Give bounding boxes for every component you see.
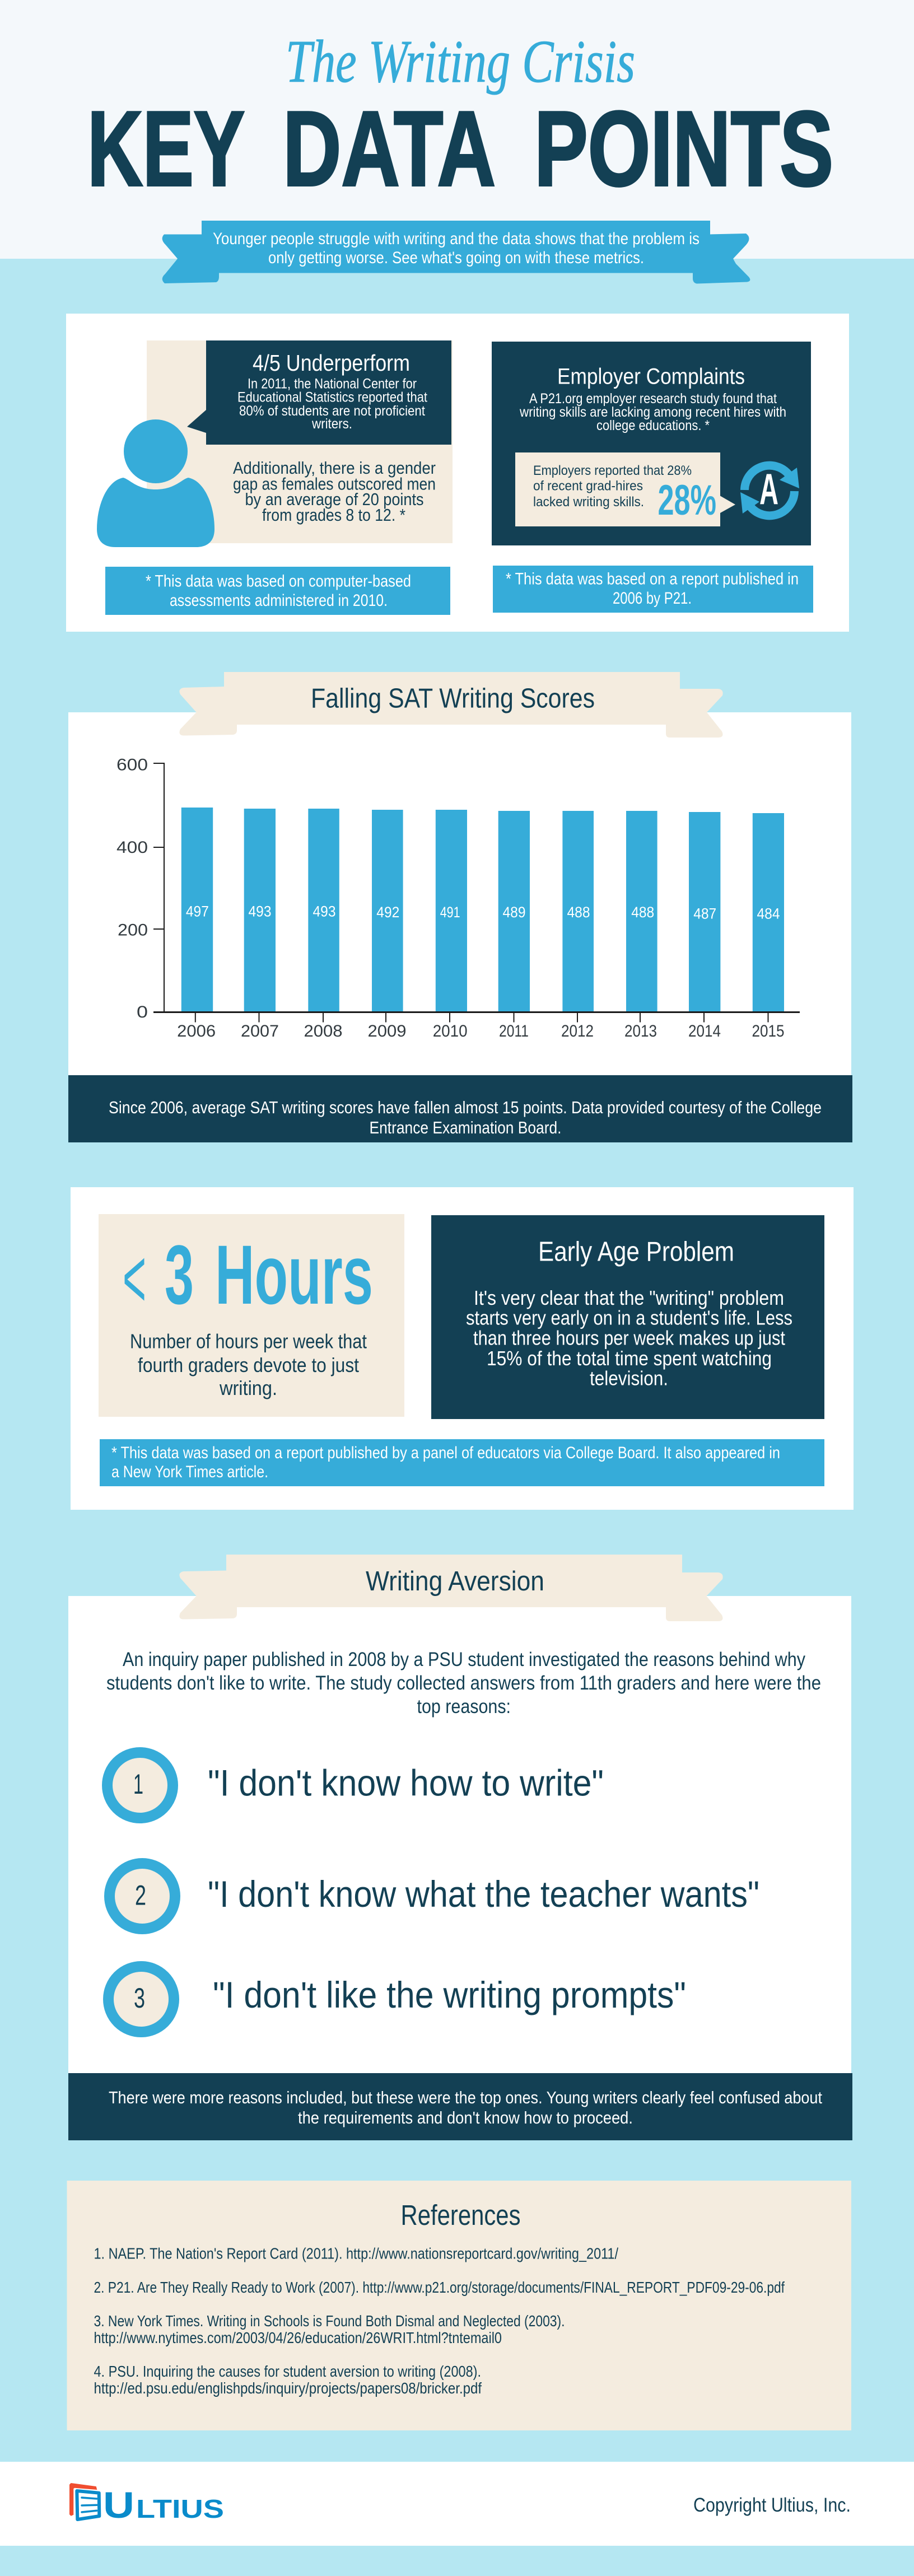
panel: employer complaints [492,342,811,545]
bar value labels: 493 [249,903,271,920]
x-axis year labels: 2014 [688,1022,721,1040]
caption: top reasons: the requirements and don't know how to proceed. [298,2108,633,2127]
y-axis labels: 200 [118,921,148,940]
text card: early age problem: Early Age Problem [538,1236,734,1267]
footer [0,2462,914,2546]
reason 3 [109,1967,686,2032]
icon: person [97,419,214,547]
reason 2: 2 [135,1879,146,1911]
heading ribbon: Writing Aversion [179,1555,723,1621]
text card: early age problem: 15% of the total time spent watching [487,1347,772,1370]
reason 2 [110,1864,759,1929]
stat card: under 3 hours: 3 [165,1228,194,1322]
note: computer-based assessments: assessments administered in 2010. [170,591,388,610]
icon: grade A with cycle arrows [740,464,799,516]
bars [181,808,784,1012]
caption: SAT scores: Entrance Examination Board. [370,1118,561,1137]
reason 2: "I don't know what the teacher wants" [208,1873,759,1915]
panel: 4/5 underperform: from grades 8 to 12. * [262,505,405,525]
intro paragraph: An inquiry paper published in 2008 by a PSU student investigated the reasons behind why [123,1649,805,1670]
reason 3: "I don't like the writing prompts" [213,1974,686,2015]
reason 1 [108,1753,604,1818]
panel: 4/5 underperform: Educational Statistics reported that [237,390,427,405]
logo: Ultius: LTIUS [136,2494,224,2523]
panel: early age problem [71,1187,854,1510]
panel: 4/5 underperform: 4/5 Underperform [253,350,410,376]
stat card: under 3 hours: Number of hours per week that [130,1329,367,1353]
text card: early age problem [431,1215,824,1419]
bar value labels: 497 [186,903,209,920]
stat card: under 3 hours [99,1214,404,1417]
panel: 4/5 underperform: writers. [311,416,352,432]
note: College Board report: a New York Times article. [111,1463,268,1481]
panel: employer complaints: Employer Complaints [557,364,745,389]
note: College Board report: * This data was based on a report published by a panel of educators via College Board. It also appeared in [111,1444,780,1462]
x-axis year labels: 2013 [624,1022,657,1040]
callout: 28 percent: 28% [657,477,716,524]
callout: 28 percent: Employers reported that 28% [533,463,692,478]
bar value labels: 484 [757,906,780,922]
stat card: under 3 hours: Hours [215,1228,373,1322]
caption: SAT scores: Since 2006, average SAT writing scores have fallen almost 15 points. Data provided courtesy of the College [109,1098,822,1117]
bar value labels: 491 [440,904,460,921]
note: computer-based assessments [105,567,450,615]
bar value labels: 492 [376,904,399,921]
bar value labels: 488 [631,904,654,921]
y-axis labels: 400 [116,838,148,857]
bar value labels [186,903,780,922]
panel: 4/5 underperform: gap as females outscored men [233,474,436,494]
intro paragraph [106,1649,821,1718]
text card: early age problem: starts very early on in a student's life. Less [466,1306,792,1329]
x-axis year labels: 2010 [433,1022,468,1040]
x-axis year labels: 2012 [561,1022,594,1040]
caption: top reasons [68,2073,852,2140]
panel: 4/5 underperform [147,340,453,543]
x-axis year labels: 2009 [367,1022,407,1040]
panel: 4/5 underperform: by an average of 20 points [245,489,423,509]
panel: references: References [401,2199,521,2231]
heading ribbon: Falling SAT Writing Scores: Falling SAT Writing Scores [311,683,595,713]
intro paragraph: top reasons: [417,1696,511,1718]
text card: early age problem: It's very clear that the "writing" problem [474,1286,784,1309]
heading ribbon: Falling SAT Writing Scores [179,672,723,738]
x-axis year labels [177,1022,785,1040]
heading: Key Data Points: KEY [87,90,245,208]
panel: references: 1. NAEP. The Nation's Report Card (2011). http://www.nationsreportcard.gov/writing_2011/ [94,2245,618,2262]
panel: references [67,2181,851,2430]
caption: top reasons: There were more reasons included, but these were the top ones. Young writers clearly feel confused about [109,2088,822,2107]
reason 1: "I don't know how to write" [208,1762,604,1803]
logo: Ultius: U [103,2484,134,2526]
x-axis year labels: 2015 [752,1022,784,1040]
intro ribbon [162,221,750,283]
bar value labels: 488 [567,904,590,921]
reason 3: 3 [134,1982,145,2014]
y-axis labels: 600 [116,756,148,774]
panel: references: http://ed.psu.edu/englishpds/inquiry/projects/papers08/bricker.pdf [94,2379,482,2397]
x-axis year labels: 2011 [499,1022,529,1040]
panel: falling SAT writing scores [68,672,852,1142]
callout: 28 percent: lacked writing skills. [533,494,644,510]
intro ribbon: only getting worse. See what's going on with these metrics. [268,249,644,267]
x-axis year labels: 2008 [304,1022,343,1040]
reason 1: 1 [133,1768,143,1800]
note: computer-based assessments: * This data was based on computer-based [146,572,411,590]
stat card: under 3 hours: fourth graders devote to just [138,1354,359,1376]
icon: grade A with cycle arrows: A [759,464,778,514]
panel: references: 3. New York Times. Writing in Schools is Found Both Dismal and Neglected (2003). [94,2312,565,2330]
text card: early age problem: television. [590,1367,668,1390]
axes [153,763,800,1023]
panel: underperform and employer complaints [66,314,849,632]
callout: 28 percent [515,452,735,526]
panel: employer complaints: A P21.org employer research study found that [529,391,777,407]
panel: references: http://www.nytimes.com/2003/04/26/education/26WRIT.html?tntemail0 [94,2329,502,2346]
x-axis year labels: 2006 [177,1022,216,1040]
panel: 4/5 underperform: In 2011, the National Center for [248,376,417,392]
note: P21 report [493,566,813,613]
panel: employer complaints: college educations. * [596,418,710,433]
y-axis labels: 0 [137,1003,148,1021]
y-axis labels [116,756,148,1021]
panel: 4/5 underperform: Additionally, there is a gender [233,458,436,478]
stat card: under 3 hours: < [123,1231,146,1325]
panel: references: 4. PSU. Inquiring the causes for student aversion to writing (2008). [94,2363,481,2380]
heading ribbon: Writing Aversion: Writing Aversion [366,1566,544,1597]
heading: Key Data Points [87,90,833,208]
panel: employer complaints: writing skills are lacking among recent hires with [519,404,786,420]
note: P21 report: * This data was based on a report published in [506,570,799,588]
intro paragraph: students don't like to write. The study collected answers from 11th graders and here were the [106,1672,821,1694]
bar value labels: 493 [313,903,336,920]
callout: 28 percent: of recent grad-hires [533,478,643,494]
note: College Board report [100,1439,824,1486]
copyright: Copyright Ultius, Inc. [693,2494,851,2516]
text card: early age problem: than three hours per week makes up just [473,1327,785,1350]
note: P21 report: 2006 by P21. [613,589,692,608]
x-axis year labels: 2007 [241,1022,279,1040]
bar value labels: 489 [503,904,525,921]
title: The Writing Crisis: The Writing Crisis [286,29,635,95]
intro ribbon: Younger people struggle with writing and the data shows that the problem is [213,230,700,248]
bar chart [116,756,800,1040]
panel: writing aversion [68,1555,852,2140]
stat card: under 3 hours: writing. [219,1376,277,1399]
caption: SAT scores [68,1075,852,1142]
logo: Ultius [69,2483,224,2526]
panel: 4/5 underperform: 80% of students are not proficient [239,403,425,419]
bar value labels: 487 [693,906,716,922]
heading: Key Data Points: DATA [283,90,496,208]
